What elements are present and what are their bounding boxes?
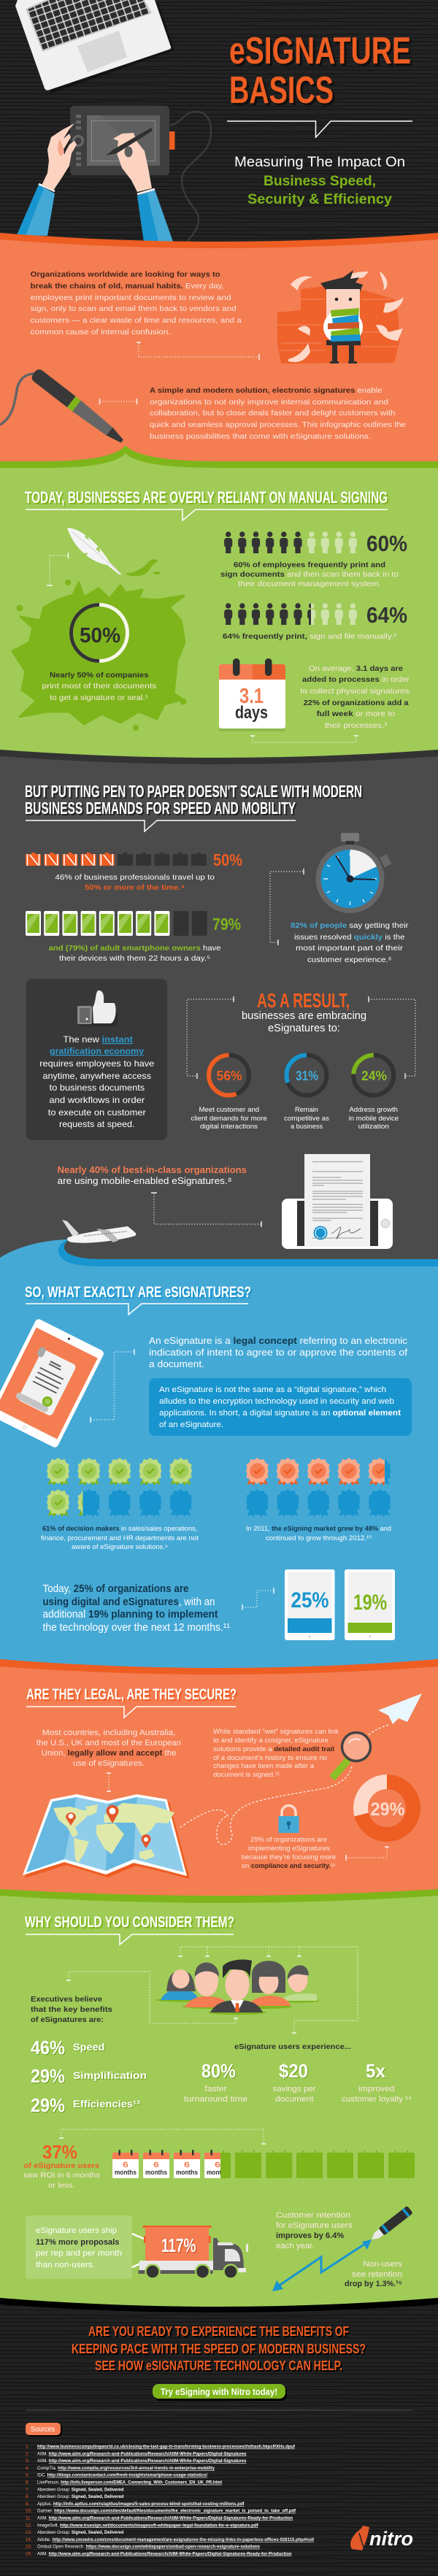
text: customer experience xyxy=(291,921,409,964)
icon: cable xyxy=(170,112,211,242)
stats: key benefits xyxy=(31,2037,147,2116)
stats: key benefits: Simplification xyxy=(73,2069,147,2081)
text: best-in-class organizations xyxy=(57,1164,247,1186)
panel: introduction xyxy=(0,233,438,467)
stat: 37 percent ROI: or less. xyxy=(48,2181,74,2190)
text: audit trail: changes have been made after a xyxy=(213,1762,315,1769)
stats: user experience: 80% xyxy=(201,2060,236,2082)
text block: manual habits: customers — a clear waste of time and resources, and a xyxy=(31,316,242,325)
pictogram: 64 percent xyxy=(224,603,407,625)
heading xyxy=(25,1914,234,1945)
text: executives believe xyxy=(31,1995,112,2024)
text: retention: Non-users xyxy=(364,2260,403,2269)
text: customer experience: 82% of people say getting their xyxy=(291,921,409,930)
panel: manual signing xyxy=(0,445,438,759)
callout: digital signature xyxy=(149,1378,412,1436)
donut: 31 percent: competitive as xyxy=(284,1115,330,1122)
callout: digital signature: An eSignature is not the same as a “digital signature,” which xyxy=(159,1385,386,1394)
text: best-in-class organizations: Nearly 40% of best-in-class organizations xyxy=(57,1164,247,1175)
sources list: 16. xyxy=(26,2551,32,2556)
text: customer experience: customer experience.⁶ xyxy=(307,956,391,964)
text: legal acceptance: Union, legally allow and accept the xyxy=(42,1749,176,1758)
text: decision makers xyxy=(41,1525,199,1550)
callout: digital signature: applications. In short, a digital signature is an optional element xyxy=(159,1409,401,1418)
text: compliance and security: 29% of organizations are xyxy=(250,1836,327,1843)
stats: key benefits: 46% xyxy=(31,2037,65,2058)
text block: manual habits: Organizations worldwide are looking for ways to xyxy=(31,270,220,279)
icon: calendar 3.1 days xyxy=(219,658,285,731)
pictogram: calendars xyxy=(112,2150,415,2178)
title: BASICS xyxy=(229,69,334,112)
sources list: 9. xyxy=(26,2502,30,2507)
callout: proposals: per rep and per month xyxy=(36,2249,122,2258)
text block: manual habits: employees print important documents to review and xyxy=(31,293,231,302)
panel: instant gratification xyxy=(26,979,167,1140)
donut: 24 percent: in mobile device xyxy=(349,1115,399,1122)
text: 60 percent: sign documents and then scan them back in to xyxy=(220,570,399,579)
text block: simple and modern solution: collaboration, but to close deals faster and delight customers with xyxy=(150,409,396,418)
text block: simple and modern solution: quick and seamless approval processes. This infographic outlines the xyxy=(150,420,406,429)
sources list: Apptus. http://info.apttus.com/rs/apttus/images/5-sales-process-blind-spotsthat-costing-millions.pdf xyxy=(37,2502,245,2507)
donut: 56 percent: client demands for more xyxy=(191,1115,267,1122)
text: adoption: Today, 25% of organizations are xyxy=(42,1583,188,1595)
callout: proposals: eSignature users ship xyxy=(36,2226,117,2235)
stats: key benefits: 29% xyxy=(31,2094,65,2116)
panel: instant gratification: gratification economy xyxy=(50,1046,144,1056)
text: travel: 46% of business professionals travel up to xyxy=(55,873,215,882)
callout: digital signature: alludes to the encryption technology used in security and web xyxy=(159,1397,394,1406)
text: adoption: additional 19% planning to implement xyxy=(42,1609,218,1620)
icon: paper plane xyxy=(378,1693,422,1724)
stats: user experience: customer loyalty ¹⁴ xyxy=(342,2095,412,2104)
text: decision makers: aware of eSignature solutions.⁹ xyxy=(72,1543,168,1550)
pictogram: suitcases: 50% xyxy=(213,850,242,869)
sources list: 3. xyxy=(26,2458,30,2464)
text: market growth: In 2011, the eSigning market grew by 48% and xyxy=(246,1525,391,1532)
icon: feather and ink xyxy=(67,528,161,576)
pictogram: 60 percent of employees: 60% xyxy=(366,531,407,556)
text block: manual habits: break the chains of old, manual habits. Every day, xyxy=(31,282,224,291)
sources list: 11. xyxy=(26,2515,32,2521)
stat: 37 percent ROI: 37% xyxy=(42,2141,77,2163)
text: market growth xyxy=(246,1525,391,1542)
donut: 56 percent: 56% xyxy=(216,1069,242,1083)
sources list: LivePerson. http://info.liveperson.com/EMEA_Connecting_With_Customers_EN_UK_PR.html xyxy=(37,2480,222,2485)
text: smartphone owners: their devices with them 22 hours a day.⁵ xyxy=(59,954,210,963)
text: 3.1 days: to collect physical signatures. xyxy=(300,688,412,696)
text: 60 percent: 60% of employees frequently print and xyxy=(234,561,385,569)
subtitle: Security & Efficiency xyxy=(247,192,392,207)
sources list: 15. xyxy=(26,2545,32,2550)
text: market growth: continued to grow through 2012.¹⁰ xyxy=(266,1534,372,1542)
heading xyxy=(26,1686,237,1718)
stats: user experience xyxy=(184,2042,412,2104)
text: 3.1 days: their processes.³ xyxy=(325,722,388,730)
text: executives believe: that the key benefits xyxy=(31,2005,112,2014)
tablet chart: 25 percent: 25% xyxy=(291,1588,328,1612)
text: retention: for eSignature users xyxy=(276,2221,353,2230)
text: 3.1 days: 22% of organizations add a xyxy=(304,699,409,707)
pictogram: calendars: 6 xyxy=(123,2161,128,2169)
title xyxy=(229,30,411,112)
sources list: 5. xyxy=(26,2473,30,2478)
heading: call to action: SEE HOW eSIGNATURE TECHNOLOGY CAN HELP. xyxy=(95,2358,342,2373)
icon: smartphone with signed document xyxy=(282,1154,393,1249)
sources list: AIIM. http://www.aiim.org/Research-and-Publications/Research/AIIM-White-Papers/Digital-Signatures xyxy=(37,2451,247,2456)
icon: signature tablet xyxy=(70,106,175,175)
icon: calendar 3.1 days: 3.1 xyxy=(239,685,264,708)
stat: 37 percent ROI: of eSignature users xyxy=(23,2161,99,2170)
donut: 24 percent: Address growth xyxy=(349,1106,398,1113)
icon: right hand with stylus xyxy=(106,128,173,242)
heading: as a result xyxy=(242,989,366,1034)
text: compliance and security xyxy=(242,1836,336,1869)
donut: 29 percent xyxy=(361,1782,413,1834)
pictogram: calendars: months xyxy=(145,2169,167,2176)
text: best-in-class organizations: are using mobile-enabled eSignatures.⁸ xyxy=(57,1175,232,1186)
heading: WHY SHOULD YOU CONSIDER THEM? xyxy=(25,1914,234,1931)
stats: user experience: eSignature users experience... xyxy=(234,2042,351,2051)
sources label: Sources xyxy=(31,2426,55,2434)
ink splat with 50 percent stat: Nearly 50% of companies xyxy=(50,671,149,680)
pictogram: calendars: 6 xyxy=(184,2161,190,2169)
donut: 31 percent: a business xyxy=(291,1123,323,1130)
text block: manual habits xyxy=(31,270,242,337)
panel: call to action and sources xyxy=(0,2298,438,2576)
text: audit trail: solutions provide a detailed audit trail xyxy=(213,1745,334,1753)
donut: 56 percent: digital interactions xyxy=(200,1123,258,1130)
panel: why consider them xyxy=(0,1889,438,2307)
sources list xyxy=(26,2444,314,2556)
heading: as a result: businesses are embracing xyxy=(242,1010,366,1022)
panel: instant gratification: anytime, anywhere access xyxy=(42,1071,151,1081)
icon: left hand and sleeve xyxy=(17,123,77,236)
icon: tablet with document xyxy=(0,1318,105,1448)
sources list: Gartner. https://www.docusign.com/sites/default/files/documents/the_electronic_signature_market_is_poised_to_take_off.pdf xyxy=(37,2509,296,2514)
heading xyxy=(25,1284,251,1315)
donut: 31 percent xyxy=(284,1056,330,1130)
text: legal acceptance: Most countries, including Australia, xyxy=(42,1729,175,1737)
button xyxy=(153,2384,287,2401)
sources list: 4. xyxy=(26,2466,30,2471)
text: audit trail: to and identify a cosigner, eSignature xyxy=(213,1737,328,1744)
text: 3.1 days xyxy=(300,665,412,730)
subtitle xyxy=(234,155,405,207)
arrow: dashed flight path xyxy=(179,1725,388,1845)
panel: what are esignatures xyxy=(0,1220,438,1672)
icon: laptop xyxy=(15,0,174,93)
text block: simple and modern solution: A simple and modern solution, electronic signatures enable xyxy=(150,386,383,395)
donut: 24 percent: utilization xyxy=(358,1123,389,1130)
sources list: 8. xyxy=(26,2494,30,2499)
button: Try eSigning with Nitro today! xyxy=(161,2387,277,2397)
pictogram: calendars: months xyxy=(176,2169,198,2176)
text: executives believe: Executives believe xyxy=(31,1995,102,2004)
text: 3.1 days: On average, 3.1 days are xyxy=(309,665,403,673)
sources list: IDC. http://blogs.constantcontact.com/fresh-insights/smartphone-usage-statistics/ xyxy=(37,2473,207,2478)
text: 60 percent xyxy=(220,561,399,588)
heading: ARE THEY LEGAL, ARE THEY SECURE? xyxy=(26,1686,237,1703)
stats: user experience: savings per xyxy=(273,2085,316,2094)
text: audit trail: While standard “wet” signatures can link xyxy=(213,1728,339,1735)
sources list: http://www.businesscomputingworld.co.uk/closing-the-last-gap-in-transforming-business-processes/#sthash.hkpcRXHx.dpuf xyxy=(37,2444,296,2450)
icon: overwhelmed worker with paper stacks xyxy=(277,270,404,364)
icon: magnifying glass xyxy=(332,1733,371,1778)
text: definition xyxy=(149,1335,408,1369)
sources list: ImageSoft. http://www.truesign.net/documents/imagesoft-whitepaper-legal-foundation-for-e-signature.pdf xyxy=(37,2523,258,2528)
text block: manual habits: sign, only to scan and email them back to vendors and xyxy=(31,304,237,313)
text: legal acceptance: use of eSignatures. xyxy=(73,1759,145,1768)
tablet chart: 25 percent xyxy=(285,1569,334,1640)
sources list: Aberdeen Group: Signed, Sealed, Delivered xyxy=(37,2494,124,2499)
ink splat with 50 percent stat xyxy=(12,580,187,731)
stats: user experience: faster xyxy=(204,2085,227,2094)
text: adoption xyxy=(42,1583,230,1634)
tablet chart: 19 percent xyxy=(345,1569,395,1640)
pictogram: 60 percent of employees xyxy=(224,531,407,556)
heading xyxy=(25,488,388,520)
text: compliance and security: implementing eSignatures xyxy=(248,1845,331,1852)
text: customer experience: most important part of their xyxy=(296,944,404,953)
stats: user experience: improved xyxy=(358,2085,394,2094)
text: legal acceptance xyxy=(36,1729,181,1768)
heading: as a result: eSignatures to: xyxy=(268,1023,340,1034)
sources list: Aberdeen Group: Signed, Sealed, Delivered xyxy=(37,2487,124,2492)
icon: world map with pins xyxy=(23,1794,190,1879)
donut: 24 percent: 24% xyxy=(361,1069,387,1083)
subtitle: Business Speed, xyxy=(264,174,376,189)
pictogram: smartphones: 79% xyxy=(212,915,241,934)
text: retention: see retention xyxy=(352,2270,402,2279)
icon: calendar 3.1 days: days xyxy=(235,703,268,723)
donut: 31 percent: Remain xyxy=(295,1106,318,1113)
sources list: 1. xyxy=(26,2444,30,2450)
stats: key benefits: Speed xyxy=(73,2041,105,2053)
text: audit trail xyxy=(213,1728,339,1778)
sources list: 14. xyxy=(26,2537,32,2542)
sources list: 7. xyxy=(26,2487,30,2492)
sources list: 13. xyxy=(26,2530,32,2535)
text: compliance and security: because they’re focusing more xyxy=(242,1853,336,1861)
text: 64 percent: 64% frequently print, sign and file manually.² xyxy=(223,632,397,641)
sources list: AIIM. http://www.aiim.org/Research-and-Publications/Research/AIIM-White-Papers/Digital-Signatures-Ready-for-Production xyxy=(37,2515,293,2521)
sources label xyxy=(26,2423,62,2437)
text: adoption: using digital and eSignatures, with an xyxy=(42,1596,215,1608)
donut: 31 percent: 31% xyxy=(296,1069,318,1083)
panel: instant gratification: The new instant xyxy=(63,1034,133,1045)
panel: instant gratification: requires employees to have xyxy=(39,1058,155,1069)
pictogram: calendars: 6 xyxy=(153,2161,159,2169)
text: retention xyxy=(276,2211,403,2288)
icon: delivery truck 117 percent: 117% xyxy=(161,2234,196,2256)
subtitle: Measuring The Impact On xyxy=(234,155,405,170)
sources list: AIIM. http://www.aiim.org/Research-and-Publications/Research/AIIM-White-Papers/Digital-Signatures-Ready-for-Production xyxy=(37,2551,292,2556)
badges: 48 percent xyxy=(246,1458,391,1517)
stats: user experience: $20 xyxy=(279,2060,308,2082)
icon: group of executives xyxy=(156,1960,319,2015)
text: audit trail: of a document’s history to ensure no xyxy=(213,1754,327,1761)
heading: BUSINESS DEMANDS FOR SPEED AND MOBILITY xyxy=(25,799,296,818)
text: decision makers: finance, procurement and HR departments are not xyxy=(41,1534,199,1542)
arrow: retention chart xyxy=(272,2239,372,2291)
donut: 56 percent: Meet customer and xyxy=(199,1106,259,1113)
donut: 56 percent xyxy=(191,1056,267,1130)
text: retention: each year. xyxy=(276,2242,314,2250)
text: definition: a document. xyxy=(149,1358,204,1369)
sources list: 12. xyxy=(26,2523,32,2528)
text: travel xyxy=(55,873,215,892)
logo: nitro: nitro xyxy=(369,2528,413,2550)
panel: speed and mobility xyxy=(0,750,438,1270)
sources list: AIIM. http://www.aiim.org/Research-and-Publications/Research/AIIM-White-Papers/Digital-Signatures xyxy=(37,2458,247,2464)
sources list: Adobe. http://www.cmswire.com/cms/document-management/are-esignatures-the-missing-links-in-paperless-offices-028115.php#null xyxy=(37,2537,314,2542)
panel: instant gratification: and workflows in order xyxy=(49,1095,145,1105)
icon: airplane xyxy=(62,1220,136,1243)
text: definition: An eSignature is a legal concept referring to an electronic xyxy=(149,1335,408,1346)
text: customer experience: issues resolved quickly is the xyxy=(294,933,405,942)
callout: digital signature: of an eSignature. xyxy=(159,1420,223,1429)
text: 3.1 days: full week or more to xyxy=(317,710,396,718)
icon: digital stylus xyxy=(0,367,126,447)
stats: user experience: document xyxy=(275,2095,314,2104)
text: retention: improves by 6.4% xyxy=(276,2231,344,2240)
text: 60 percent: their document management system. xyxy=(238,580,381,588)
stats: user experience: 5x xyxy=(366,2060,386,2082)
text: smartphone owners: and (79%) of adult smartphone owners have xyxy=(49,944,221,953)
panel: instant gratification: requests at speed. xyxy=(59,1119,134,1129)
text: retention: Customer retention xyxy=(276,2211,350,2220)
pictogram: 64 percent: 64% xyxy=(366,602,407,628)
panel: legal and secure xyxy=(0,1659,438,1898)
stats: user experience: turnaround time xyxy=(184,2095,247,2104)
text: 3.1 days: added to processes in order xyxy=(302,676,410,684)
text: executives believe: of eSignatures are: xyxy=(31,2015,104,2024)
text block: simple and modern solution: organizations to not only improve internal communication and xyxy=(150,398,388,407)
heading: SO, WHAT EXACTLY ARE eSIGNATURES? xyxy=(25,1284,251,1301)
heading: call to action: ARE YOU READY TO EXPERIENCE THE BENEFITS OF xyxy=(88,2323,349,2339)
sources list: Ombud Open Research. https://www.docusign.com/whitepapers/ombud-open-research-esignature-solutions xyxy=(37,2545,260,2550)
text block: manual habits: common cause of internal confusion. xyxy=(31,328,171,337)
pictogram: calendars: months xyxy=(115,2169,137,2176)
text: retention: drop by 1.3%.¹⁵ xyxy=(345,2280,402,2288)
pictogram: smartphones xyxy=(26,911,241,936)
icon: padlock xyxy=(279,1806,299,1833)
tablet chart: 19 percent: 19% xyxy=(353,1591,387,1615)
sources list: 6. xyxy=(26,2480,30,2485)
donut: 29 percent: 29% xyxy=(371,1799,404,1820)
ink splat with 50 percent stat: 50% xyxy=(80,624,120,647)
stat: 37 percent ROI xyxy=(23,2141,100,2190)
icon: thumbs up xyxy=(77,991,118,1026)
heading: as a result: AS A RESULT, xyxy=(257,989,350,1012)
panel: header xyxy=(0,0,438,252)
pictogram: suitcases xyxy=(26,850,242,869)
pictogram: calendars: months xyxy=(207,2169,228,2176)
panel: instant gratification: to execute on customer xyxy=(48,1107,146,1118)
badges: 61 percent xyxy=(47,1458,192,1517)
text: adoption: the technology over the next 12 months.¹¹ xyxy=(42,1622,230,1634)
text block: simple and modern solution: business possibilities that come with eSignature solutions. xyxy=(150,432,371,441)
icon: fountain pen xyxy=(369,2206,413,2243)
stats: key benefits: Efficiencies¹³ xyxy=(73,2098,140,2110)
text: travel: 50% or more of the time.⁴ xyxy=(85,883,185,892)
icon: stopwatch xyxy=(315,833,392,913)
text: compliance and security: on compliance and security.¹² xyxy=(242,1862,335,1869)
text: smartphone owners xyxy=(49,944,221,963)
text: definition: indication of intent to agree to or approve the contents of xyxy=(149,1347,407,1358)
callout: proposals: than non-users. xyxy=(36,2261,95,2269)
sources list: Aberdeen Group: Signed, Sealed, Delivered xyxy=(37,2530,124,2535)
callout: proposals xyxy=(26,2215,132,2279)
callout: proposals: 117% more proposals xyxy=(36,2238,120,2247)
text block: simple and modern solution xyxy=(150,386,406,441)
stat: 37 percent ROI: saw ROI in 6 months xyxy=(23,2171,100,2180)
donut: 24 percent xyxy=(349,1056,399,1130)
text: decision makers: 61% of decision makers in sales/sales operations, xyxy=(42,1525,197,1532)
icon: delivery truck 117 percent xyxy=(139,2226,248,2279)
stats: key benefits: 29% xyxy=(31,2065,65,2087)
heading: call to action xyxy=(72,2323,366,2373)
text: audit trail: document is signed.¹¹ xyxy=(213,1771,280,1778)
pictogram: calendars: 6 xyxy=(215,2161,220,2169)
sources list: CompTIa. http://www.comptia.org/resources/3rd-annual-trends-in-enterprise-mobility xyxy=(37,2466,215,2471)
sources list: 2. xyxy=(26,2451,30,2456)
ink splat with 50 percent stat: to get a signature or seal.¹ xyxy=(50,693,148,702)
heading xyxy=(25,782,362,831)
sources list: 10. xyxy=(26,2509,32,2514)
panel: instant gratification: to business documents xyxy=(50,1083,145,1093)
text: legal acceptance: the U.S., UK and most of the European xyxy=(36,1739,181,1748)
logo: nitro xyxy=(350,2526,413,2550)
ink splat with 50 percent stat: print most of their documents xyxy=(42,682,156,691)
